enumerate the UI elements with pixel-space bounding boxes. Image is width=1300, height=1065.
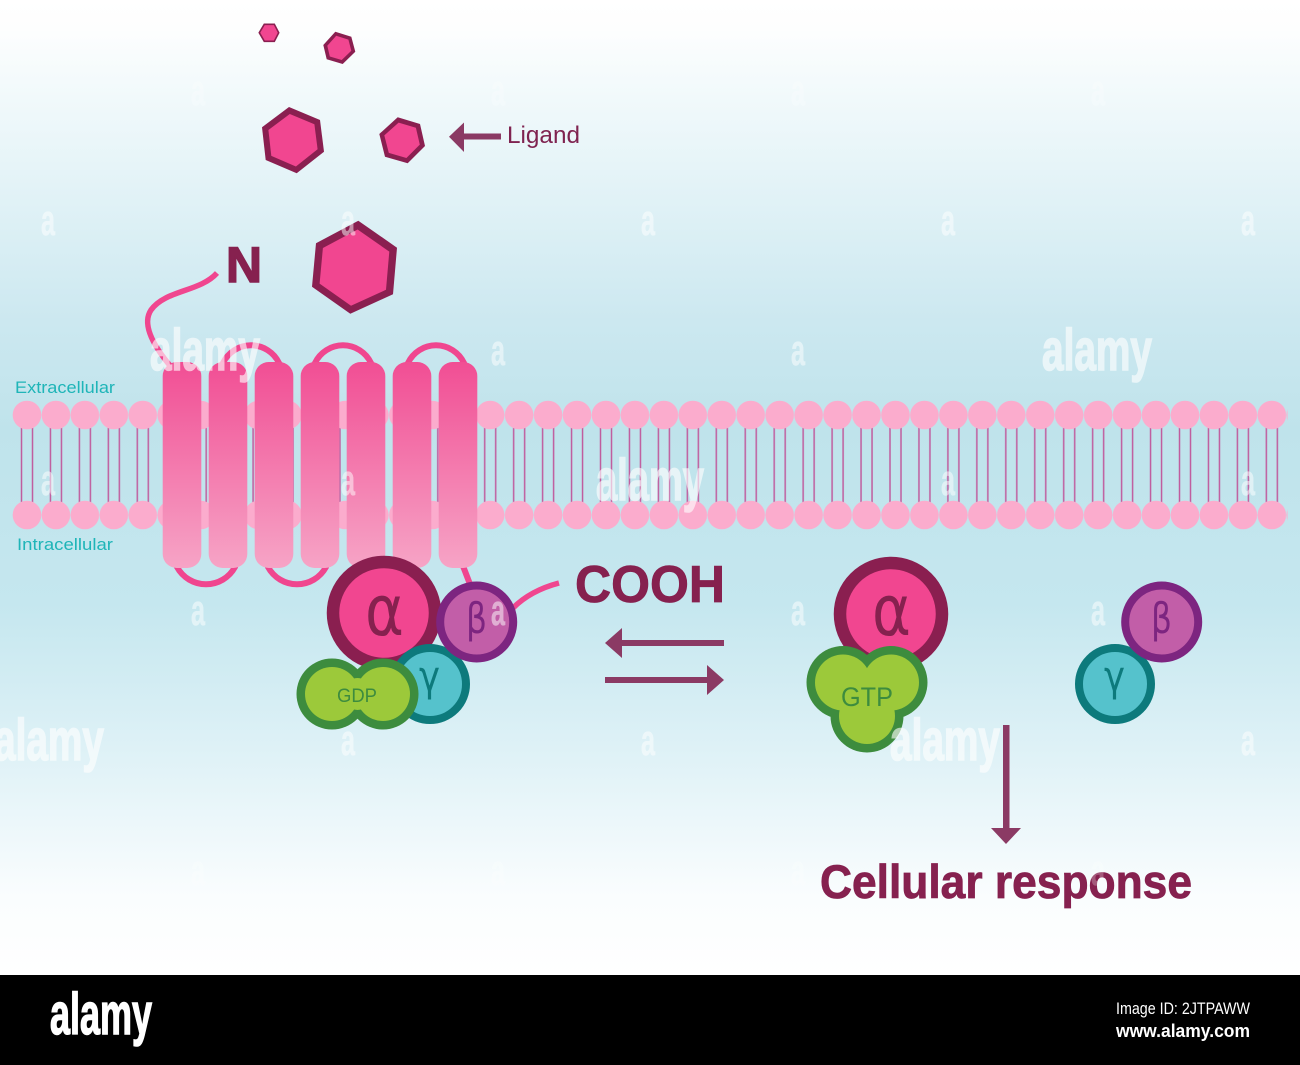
watermarks: a [941,456,955,505]
watermarks: a [191,586,205,635]
label: Intracellular: Intracellular [17,536,114,554]
watermarks: alamy [150,318,260,383]
G protein beta subunit, free: β [1151,594,1172,643]
watermarks: a [641,716,655,765]
watermarks: a [1091,66,1105,115]
G protein gamma subunit, bound [394,648,466,720]
watermarks: a [341,456,355,505]
label: N terminus: N [226,237,262,293]
arrow: forward equilibrium [605,665,724,695]
G protein alpha subunit, bound [333,562,435,664]
ligand hexagons [259,24,425,314]
label: Cellular response: Cellular response [820,855,1192,908]
G protein gamma subunit, free [1079,648,1151,720]
G protein alpha subunit, free: α [872,570,911,652]
watermarks: a [491,586,505,635]
label: Ligand: Ligand [507,122,580,149]
watermarks: a [791,586,805,635]
footer bar [0,975,1300,1065]
cell membrane lipid bilayer [12,400,1288,530]
label: Extracellular: Extracellular [15,379,116,397]
watermarks: a [1241,716,1255,765]
watermarks: a [41,196,55,245]
watermarks: a [1091,586,1105,635]
arrow: to ligand [449,122,501,152]
watermarks: a [791,846,805,895]
watermarks: a [941,196,955,245]
G protein alpha subunit, free [840,563,942,665]
watermarks: alamy [596,448,704,513]
GDP molecule [296,658,418,730]
arrow: reverse equilibrium [605,628,724,658]
watermarks: a [191,846,205,895]
seven transmembrane helices [163,362,477,568]
watermarks: a [1241,196,1255,245]
G protein beta subunit, bound: β [466,594,487,643]
G protein beta subunit, bound [440,586,513,658]
watermarks: a [1091,846,1105,895]
watermarks: a [491,846,505,895]
footer bar: alamy [50,982,152,1047]
watermarks: a [341,716,355,765]
arrow: to cellular response [991,725,1021,844]
watermarks: a [791,66,805,115]
N-terminal tail [148,273,217,368]
G protein gamma subunit, bound: γ [419,652,440,701]
watermarks: alamy [890,708,1000,773]
C-terminal tail [513,583,559,608]
watermarks: a [1241,456,1255,505]
label: COOH: COOH [575,556,725,614]
watermarks [0,66,1255,895]
G protein gamma subunit, free: γ [1104,652,1125,701]
watermarks: alamy [1042,318,1152,383]
footer bar: www.alamy.com [1115,1021,1250,1041]
footer bar: Image ID: 2JTPAWW [1116,999,1250,1018]
GDP molecule: GDP [337,686,377,707]
watermarks: a [191,66,205,115]
watermarks: a [341,196,355,245]
watermarks: a [791,326,805,375]
watermarks: a [491,66,505,115]
watermarks: a [641,196,655,245]
G protein beta subunit, free [1125,586,1198,658]
GTP molecule [806,646,928,752]
G protein alpha subunit, bound: α [365,570,404,652]
watermarks: a [41,456,55,505]
GTP molecule: GTP [841,682,893,712]
watermarks: a [491,326,505,375]
receptor connecting loops [175,345,473,592]
